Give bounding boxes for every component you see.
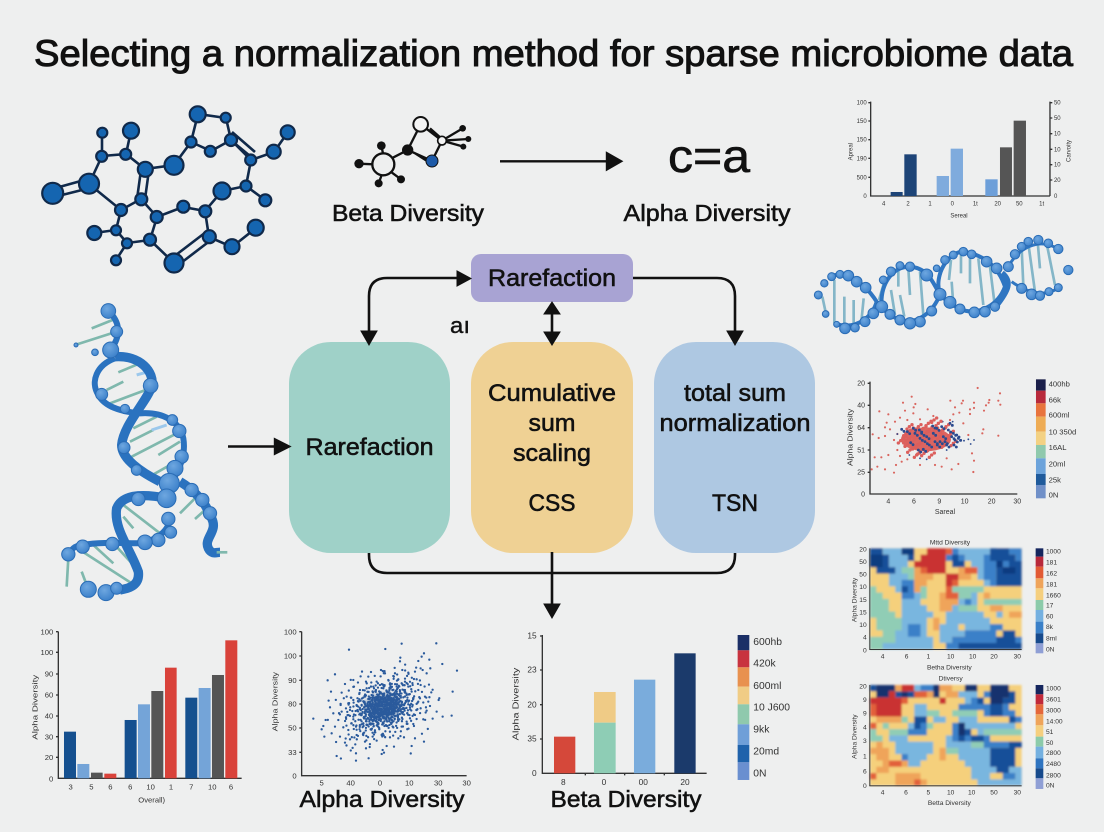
chart: top-right bar chart: 1t <box>1039 201 1044 207</box>
chart: top-right bar chart: 150 <box>857 119 867 125</box>
chart: bottom heatmap: 10 <box>968 789 976 796</box>
legend: top heatmap: 181 <box>1046 559 1057 566</box>
icon: small molecule <box>354 117 471 187</box>
chart: top-right bar chart: 0 <box>863 194 867 200</box>
legend: bottom heatmap: 14:00 <box>1046 718 1063 725</box>
chart: top-right bar chart: 20 <box>1054 178 1061 184</box>
label: Beta Diversity (bottom): Beta Diversity <box>550 786 702 812</box>
legend: top heatmap: 1660 <box>1046 592 1061 599</box>
chart: right scatter plot: 64 <box>857 425 865 432</box>
chart: bottom heatmap: 0 <box>863 783 867 790</box>
chart: bottom scatter plot: Alpha Diversity <box>270 672 279 731</box>
chart: top-right bar chart: 150 <box>857 138 867 144</box>
legend: right scatter: 400hb <box>1049 380 1070 389</box>
chart: top heatmap: 20 <box>990 653 998 660</box>
chart: bottom stacked bar chart: 15 <box>527 631 537 641</box>
chart: bottom scatter plot: 5 <box>320 779 324 788</box>
chart: bottom stacked bar chart: 35 <box>527 734 537 744</box>
box: Rarefaction <box>289 342 450 553</box>
chart: bottom-left bar chart: 6 <box>128 782 132 791</box>
legend: top heatmap: 17 <box>1046 603 1054 610</box>
box: Cumulative sum scaling <box>471 342 633 553</box>
chart: top-right bar chart: Carvoity <box>1067 140 1073 162</box>
chart: bottom-left bar chart: 6 <box>229 782 233 791</box>
icon: right DNA helix <box>814 235 1073 334</box>
chart: top-right bar chart: 50 <box>1054 101 1061 107</box>
chart: bottom heatmap: 50 <box>990 789 998 796</box>
chart: top-right bar chart <box>849 101 1073 219</box>
chart: top heatmap: 20 <box>859 546 867 553</box>
chart: top-right bar chart: Apreal <box>849 143 855 160</box>
chart: bottom stacked bar chart: 00 <box>639 777 648 787</box>
chart: right scatter plot: 30 <box>1013 498 1021 505</box>
arrow: top to left box (bidirectional) <box>361 271 471 345</box>
chart: top-right bar chart: Sereal <box>950 213 968 219</box>
chart: top-right bar chart: 10 <box>1054 147 1061 153</box>
legend: bottom heatmap: 0N <box>1046 782 1055 789</box>
chart: top-right bar chart: 10 <box>1054 132 1061 138</box>
legend: bottom heatmap: 51 <box>1046 729 1054 736</box>
chart: bottom-left bar chart: 10 <box>146 782 155 791</box>
arrow: into Rarefaction box <box>228 440 289 454</box>
chart: bottom heatmap: Dtiversy <box>939 676 963 683</box>
chart: bottom stacked bar chart: 8 <box>561 777 566 787</box>
chart: bottom heatmap: Betta Diversity <box>928 800 971 807</box>
chart: top heatmap: 10 <box>859 584 867 591</box>
chart: top-right bar chart: 20 <box>994 201 1002 207</box>
chart: bottom-left bar chart: 3 <box>69 782 73 791</box>
box: Cumulative sum scaling: scaling <box>513 440 591 467</box>
legend: top heatmap: 60 <box>1046 613 1054 620</box>
chart: bottom heatmap: 10 <box>947 789 955 796</box>
label: Alpha Diversity (top): Alpha Diversity <box>624 200 791 226</box>
chart: bottom heatmap: 1 <box>863 754 867 761</box>
legend: bottom heatmap: 2480 <box>1046 761 1061 768</box>
heat grid top <box>870 548 1022 649</box>
legend: right scatter: 10 350d <box>1049 427 1076 436</box>
chart: bottom scatter plot: 80 <box>288 700 297 709</box>
chart: top-right bar chart: 10 <box>1054 163 1061 169</box>
legend: right scatter: 66k <box>1049 395 1061 404</box>
chart: bottom heatmap: 9 <box>863 697 867 704</box>
chart: bottom heatmap: 6 <box>904 789 908 796</box>
legend: right scatter: 16AL <box>1049 443 1067 452</box>
legend: top heatmap: 0N <box>1046 647 1055 654</box>
icon: left DNA helix <box>62 304 227 601</box>
chart: bottom-left bar chart: Overall) <box>138 796 165 805</box>
box: Cumulative sum scaling: CSS <box>528 490 576 517</box>
chart: bottom scatter plot: 0 <box>292 772 297 781</box>
box: total sum normalization: normalization <box>660 410 810 437</box>
legend: right scatter: 25k <box>1049 476 1061 485</box>
arrow: top to CSS box (bidirectional) <box>544 302 560 345</box>
legend: stacked bar chart: 600ml <box>753 681 781 692</box>
legend: top heatmap: 181 <box>1046 582 1057 589</box>
legend: stacked bar chart: 20md <box>753 747 779 758</box>
chart: bottom scatter plot: 30 <box>462 779 471 788</box>
box: total sum normalization: TSN <box>712 490 758 517</box>
chart: bottom heatmap: 4 <box>863 725 867 732</box>
legend: bottom heatmap: 3601 <box>1046 697 1061 704</box>
chart: bottom scatter plot: 100 <box>284 652 297 661</box>
chart: bottom heatmap <box>852 676 1063 807</box>
box: Rarefaction top <box>471 254 633 302</box>
chart: bottom scatter plot: 33 <box>288 748 297 757</box>
legend: bottom heatmap: 3000 <box>1046 708 1061 715</box>
chart: right scatter plot <box>848 379 1076 516</box>
chart: bottom scatter plot: 0 <box>378 779 382 788</box>
chart: bottom scatter plot: 100 <box>284 627 297 636</box>
chart: top heatmap: 4 <box>881 653 885 660</box>
legend: stacked bar chart: 420k <box>753 659 777 670</box>
chart: top heatmap: 1 <box>926 653 930 660</box>
chart: bottom stacked bar chart: 0 <box>532 768 537 778</box>
heat grid bottom <box>870 685 1022 786</box>
chart: top-right bar chart: 0 <box>1054 194 1058 200</box>
chart: bottom-left bar chart: 100 <box>41 648 53 657</box>
chart: top-right bar chart: 500 <box>857 175 867 181</box>
chart: right scatter plot: 0 <box>861 491 865 498</box>
chart: right scatter plot: 10 <box>961 498 969 505</box>
arrow: top to TSN box <box>633 278 743 345</box>
chart: bottom-left bar chart: 6 <box>108 782 112 791</box>
chart: top heatmap: Mttd Diversity <box>930 539 971 546</box>
arrow: top <box>500 153 621 169</box>
chart: top heatmap: 50 <box>859 559 867 566</box>
chart: bottom scatter plot: 40 <box>346 779 355 788</box>
chart: bottom scatter plot: 10 <box>405 779 414 788</box>
box: total sum normalization <box>654 342 815 553</box>
chart: top heatmap: 15 <box>859 597 867 604</box>
box: Cumulative sum scaling: sum <box>528 410 576 437</box>
chart: bottom-left bar chart: 40 <box>45 712 53 721</box>
legend: stacked bar chart <box>738 635 790 780</box>
chart: bottom stacked bar chart: 23 <box>527 665 537 675</box>
chart: top heatmap: 10 <box>859 622 867 629</box>
legend: stacked bar chart: 9kk <box>753 724 770 735</box>
chart: top-right bar chart: 50 <box>1016 201 1023 207</box>
title: Selecting a normalization method for sparse microbiome data <box>34 33 1073 74</box>
legend: top heatmap: 8ml <box>1046 636 1057 643</box>
chart: right scatter plot: 9 <box>937 498 941 505</box>
chart: bottom-left bar chart: 0 <box>49 775 53 784</box>
legend: bottom heatmap: 1000 <box>1046 686 1061 693</box>
chart: top-right bar chart: 190 <box>857 156 867 162</box>
chart: bottom-left bar chart: 30 <box>45 732 53 741</box>
chart: bottom scatter plot: 30 <box>434 779 443 788</box>
chart: bottom-left bar chart <box>30 627 242 805</box>
legend: stacked bar chart: 10 J600 <box>753 703 790 714</box>
box: Rarefaction top: Rarefaction <box>488 265 616 292</box>
chart: bottom scatter plot: 50 <box>288 724 297 733</box>
chart: bottom stacked bar chart: Alpha Diversity <box>511 667 521 740</box>
arrow: merge bracket <box>369 552 735 618</box>
chart: right scatter plot: 6 <box>912 498 916 505</box>
chart: bottom stacked bar chart <box>511 631 790 787</box>
label: Alpha Diversity (bottom): Alpha Diversity <box>300 786 465 812</box>
chart: top heatmap: 6 <box>905 653 909 660</box>
chart: bottom-left bar chart: 7 <box>189 782 193 791</box>
chart: right scatter plot: Sareal <box>935 509 956 516</box>
label: Beta Diversity (top): Beta Diversity <box>332 200 485 226</box>
chart: top-right bar chart: 2 <box>906 201 910 207</box>
chart: bottom-left bar chart: 5 <box>89 782 93 791</box>
formula: c=a <box>668 130 750 182</box>
chart: bottom-left bar chart: 60 <box>45 691 53 700</box>
chart: bottom stacked bar chart: 0 <box>602 777 607 787</box>
chart: top-right bar chart: 50 <box>1054 116 1061 122</box>
chart: right scatter plot: 20 <box>988 498 996 505</box>
chart: right scatter plot: 20 <box>857 381 865 388</box>
stray label: aı <box>450 313 470 338</box>
chart: right scatter plot: 51 <box>857 447 865 454</box>
chart: top heatmap: 50 <box>859 571 867 578</box>
icon: large molecule <box>42 106 295 272</box>
legend: right scatter: 20ml <box>1049 460 1066 469</box>
chart: right scatter plot: 40 <box>857 403 865 410</box>
chart: bottom heatmap: 20 <box>859 684 867 691</box>
chart: bottom scatter plot <box>270 627 471 788</box>
chart: bottom heatmap: 6 <box>863 769 867 776</box>
legend: top heatmap <box>1036 548 1061 654</box>
chart: bottom stacked bar chart: 20 <box>680 777 690 787</box>
chart: top heatmap: Betha Diversity <box>927 664 972 671</box>
chart: bottom-left bar chart: 10 <box>208 782 217 791</box>
legend: right scatter <box>1036 379 1076 499</box>
chart: top heatmap: 0 <box>863 648 867 655</box>
chart: top heatmap: 10 <box>947 653 955 660</box>
box: Cumulative sum scaling: Cumulative <box>488 380 616 407</box>
chart: bottom scatter plot: 90 <box>288 676 297 685</box>
legend: bottom heatmap <box>1036 685 1063 789</box>
chart: bottom heatmap: Alpha Diversity <box>852 714 859 759</box>
legend: top heatmap: 162 <box>1046 571 1057 578</box>
chart: bottom heatmap: 3 <box>863 738 867 745</box>
chart: top heatmap: 4 <box>863 634 867 641</box>
box: total sum normalization: total sum <box>684 380 786 407</box>
chart: bottom-left bar chart: 100 <box>41 627 53 636</box>
legend: right scatter: 0N <box>1049 490 1058 499</box>
legend: stacked bar chart: 600hb <box>753 637 782 648</box>
chart: bottom heatmap: 5 <box>926 789 930 796</box>
chart: top-right bar chart: 0 <box>951 201 955 207</box>
chart: top heatmap: 30 <box>1014 653 1021 660</box>
chart: right scatter plot: 25 <box>857 470 865 477</box>
chart: bottom stacked bar chart: 20 <box>527 699 537 709</box>
chart: bottom-left bar chart: 90 <box>45 670 53 679</box>
legend: bottom heatmap: 2800 <box>1046 750 1061 757</box>
chart: top-right bar chart: 1 <box>928 201 932 207</box>
chart: top-right bar chart: 1t <box>973 201 978 207</box>
box: Rarefaction: Rarefaction <box>306 434 434 461</box>
chart: top heatmap <box>852 539 1061 671</box>
chart: top heatmap: Alpha Diversity <box>852 577 859 622</box>
legend: bottom heatmap: 2800 <box>1046 772 1061 779</box>
chart: bottom-left bar chart: 1 <box>169 782 173 791</box>
chart: bottom-left bar chart: 20 <box>45 753 53 762</box>
legend: top heatmap: 1000 <box>1046 548 1061 555</box>
legend: top heatmap: 8k <box>1046 624 1054 631</box>
chart: right scatter plot: Alpha Diversity <box>848 408 855 466</box>
chart: top heatmap: 10 <box>969 653 977 660</box>
chart: bottom heatmap: 30 <box>1014 789 1021 796</box>
legend: right scatter: 600ml <box>1049 411 1070 420</box>
chart: bottom-left bar chart: Alpha Diversity <box>30 675 39 740</box>
chart: right scatter plot: 4 <box>886 498 890 505</box>
legend: bottom heatmap: 50 <box>1046 740 1054 747</box>
chart: top-right bar chart: 4 <box>882 201 886 207</box>
chart: bottom heatmap: 4 <box>881 789 885 796</box>
chart: top heatmap: 15 <box>859 609 867 616</box>
legend: stacked bar chart: 0N <box>753 768 767 779</box>
chart: bottom heatmap: 9 <box>863 710 867 717</box>
chart: top-right bar chart: 100 <box>857 101 867 107</box>
